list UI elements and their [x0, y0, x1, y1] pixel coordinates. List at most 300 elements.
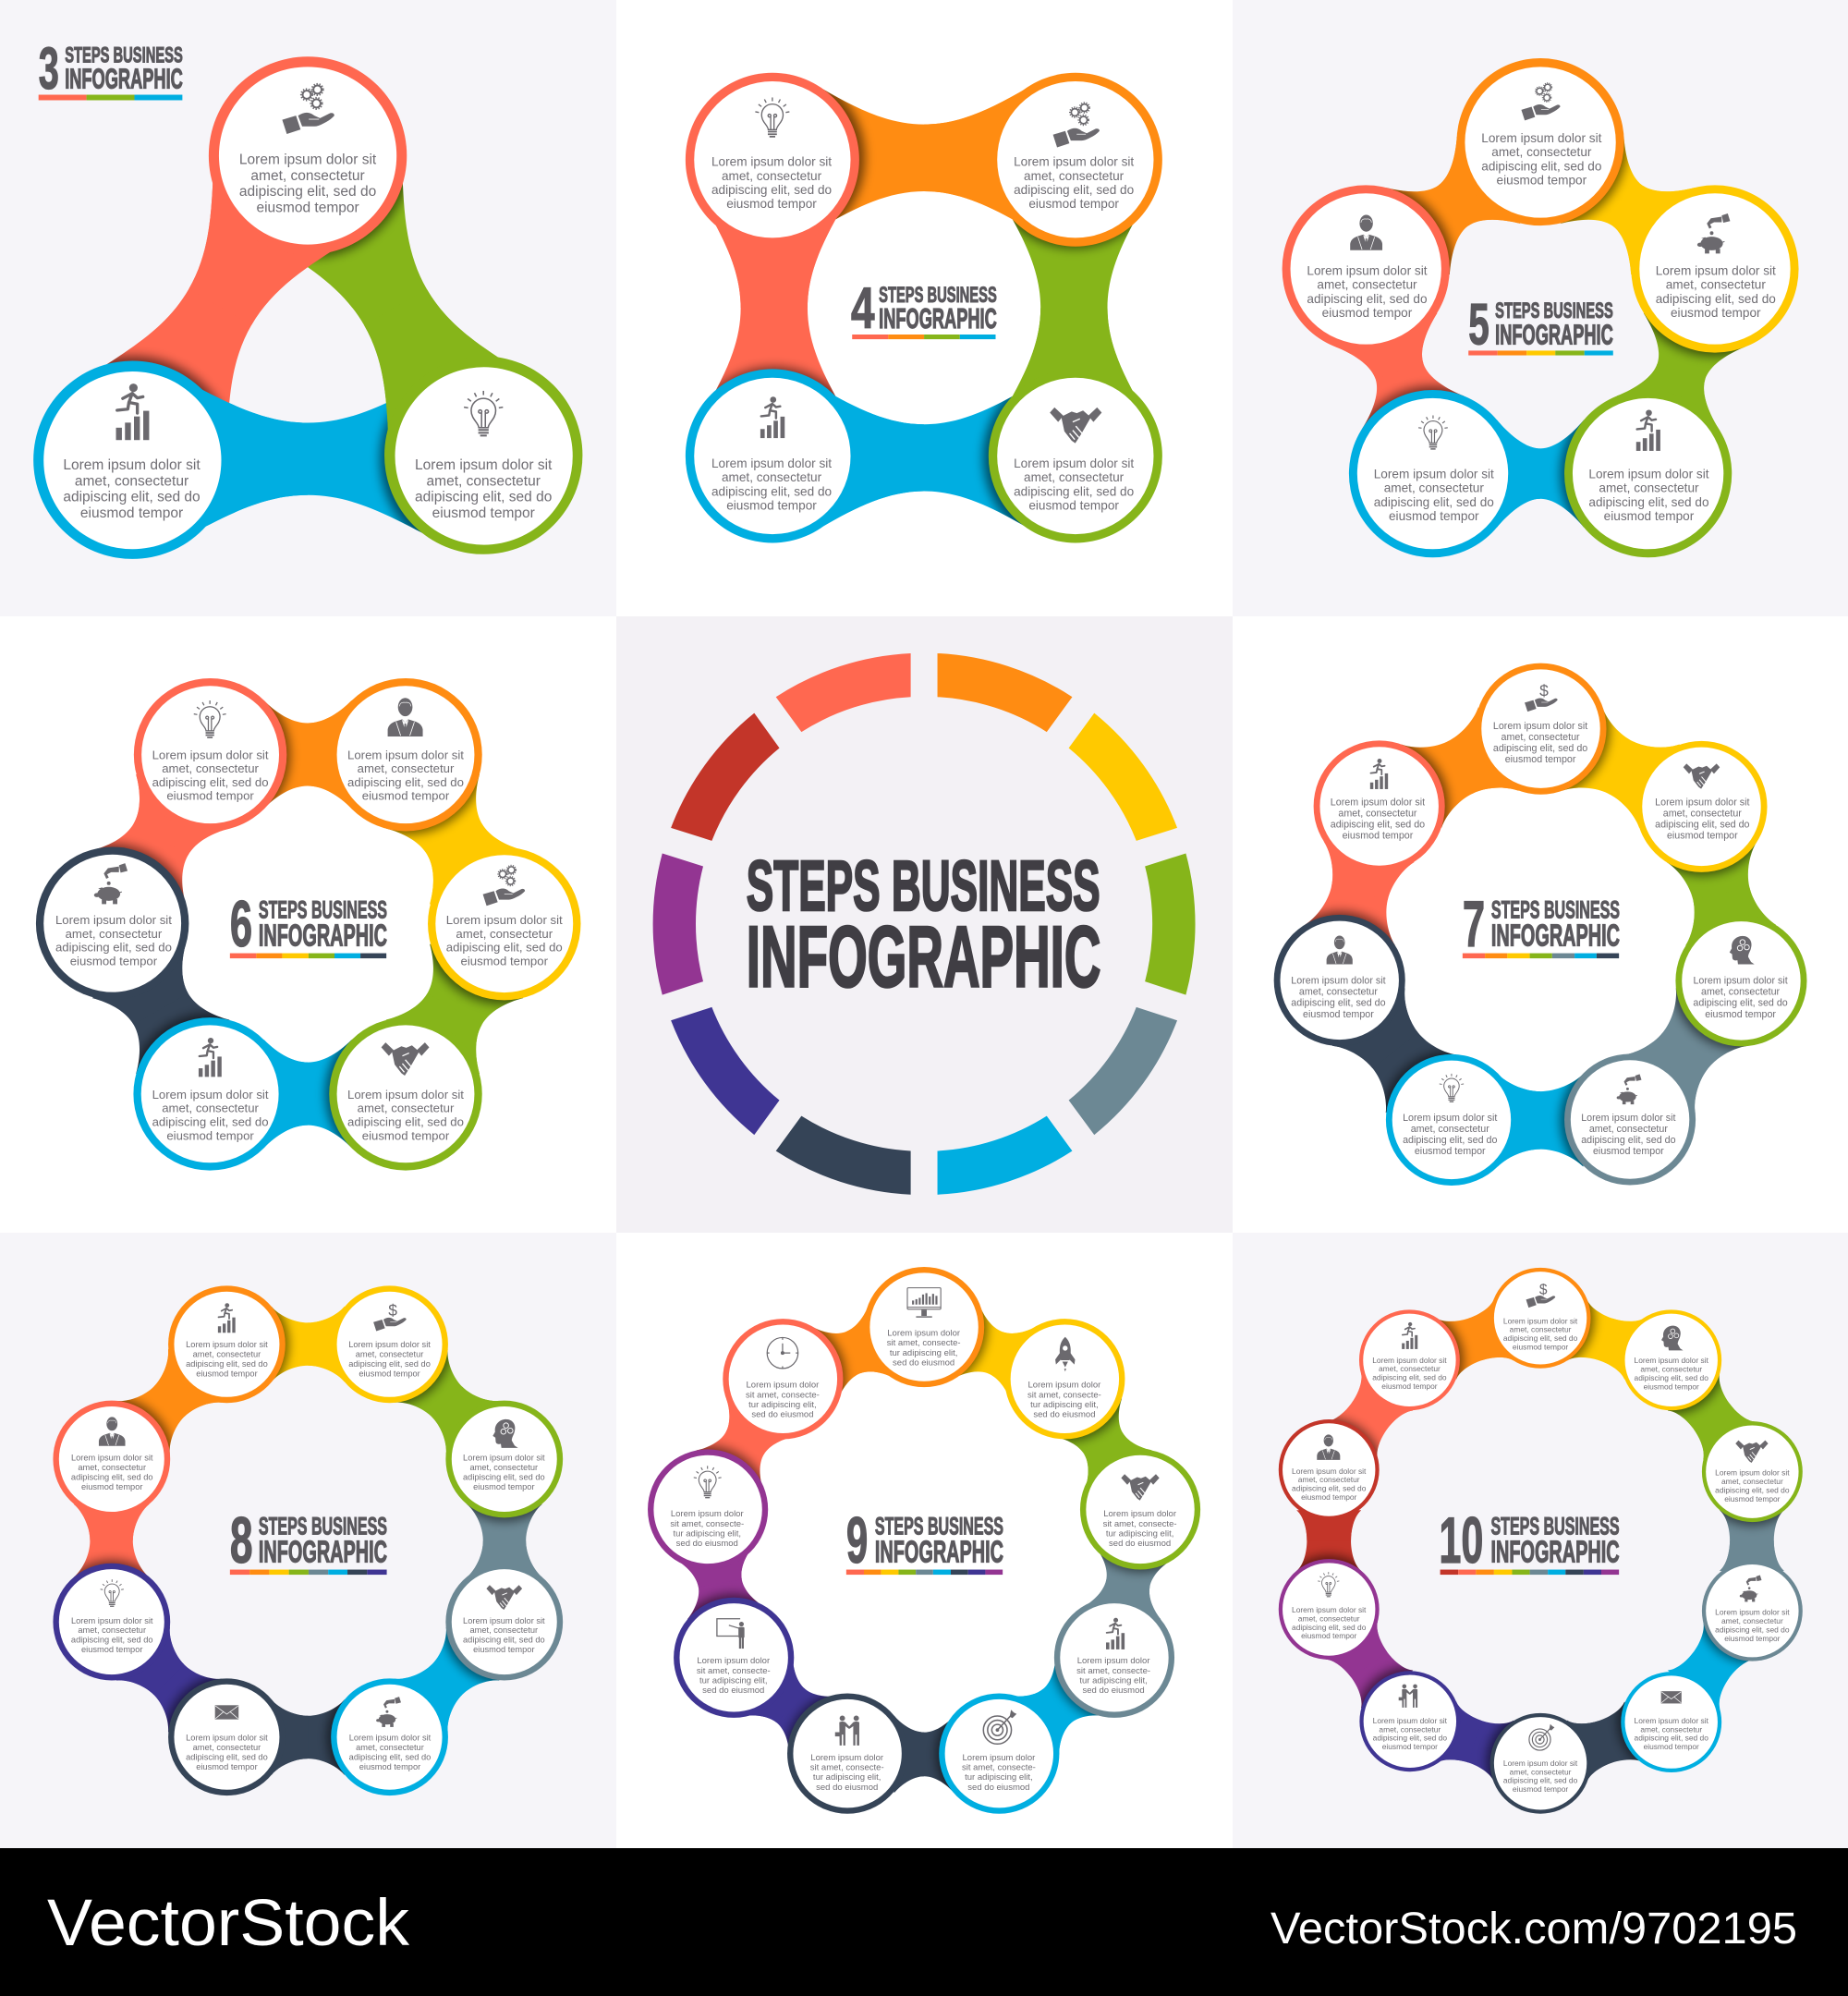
icon: runner on bars — [1636, 409, 1660, 451]
text: sit amet, consecte- — [962, 1763, 1036, 1773]
text: Lorem ipsum dolor sit — [186, 1340, 268, 1349]
text: eiusmod tempor — [1705, 1009, 1776, 1020]
step: yellow — [331, 1285, 448, 1403]
step: orange — [989, 73, 1162, 247]
icon: runner on bars — [1370, 759, 1388, 789]
text: eiusmod tempor — [1303, 1009, 1374, 1020]
text: amet, consectetur — [193, 1743, 261, 1752]
icon: piggy bank — [94, 863, 128, 904]
text: sit amet, consecte- — [1076, 1666, 1150, 1676]
connectors — [620, 1245, 1215, 1844]
step: gray — [1054, 1598, 1174, 1718]
text: amet, consectetur — [470, 1625, 538, 1635]
text: Lorem ipsum dolor sit — [463, 1454, 545, 1463]
step: navy — [168, 1678, 286, 1795]
text: sed do eiusmod — [816, 1783, 878, 1793]
step: coral — [1359, 1309, 1460, 1410]
text: Lorem ipsum dolor sit — [152, 748, 269, 761]
text: tur adipiscing elit, — [673, 1528, 741, 1539]
text: Lorem ipsum dolor sit — [55, 913, 172, 927]
step: cyan — [133, 1017, 286, 1171]
title: 6 steps — [230, 887, 387, 960]
step: purple — [648, 1449, 768, 1570]
text: Lorem ipsum dolor sit — [1292, 1605, 1367, 1614]
title: 7 steps — [1463, 887, 1620, 960]
text: adipiscing elit, sed do — [1292, 1484, 1367, 1493]
text: eiusmod tempor — [256, 201, 359, 216]
text: Lorem ipsum dolor — [962, 1753, 1036, 1763]
text: adipiscing elit, sed do — [152, 775, 269, 789]
text: amet, consectetur — [1317, 278, 1417, 292]
text: eiusmod tempor — [1667, 831, 1738, 842]
icon: light bulb — [1318, 1572, 1339, 1597]
text: Lorem ipsum dolor sit — [446, 913, 563, 927]
icon: light bulb — [694, 1466, 722, 1498]
text: eiusmod tempor — [473, 1645, 535, 1654]
text: Lorem ipsum dolor — [671, 1509, 744, 1519]
text: sit amet, consecte- — [697, 1666, 771, 1676]
text: amet, consectetur — [1299, 987, 1378, 998]
text: eiusmod tempor — [362, 789, 450, 803]
connectors — [684, 67, 1165, 549]
text: amet, consectetur — [78, 1463, 146, 1472]
step: orange — [1475, 663, 1607, 795]
text: amet, consectetur — [1721, 1477, 1783, 1486]
text: Lorem ipsum dolor sit — [1581, 1113, 1676, 1124]
step: navy — [1274, 915, 1405, 1046]
title: 9 steps — [846, 1503, 1003, 1576]
text: tur adipiscing elit, — [699, 1676, 768, 1686]
text: Lorem ipsum dolor sit — [71, 1616, 153, 1625]
text: adipiscing elit, sed do — [1014, 183, 1134, 197]
text: Lorem ipsum dolor sit — [1588, 467, 1709, 481]
ring segments — [653, 653, 1196, 1195]
text: Lorem ipsum dolor sit — [415, 457, 553, 473]
text: eiusmod tempor — [1724, 1494, 1781, 1503]
text: adipiscing elit, sed do — [1503, 1333, 1578, 1343]
icon: businessman — [1350, 215, 1382, 250]
text: Lorem ipsum dolor — [1028, 1381, 1101, 1391]
text: eiusmod tempor — [359, 1762, 420, 1771]
text: adipiscing elit, sed do — [55, 941, 172, 955]
title: 9 steps: INFOGRAPHIC — [875, 1535, 1003, 1569]
title: 10 steps: INFOGRAPHIC — [1490, 1535, 1620, 1569]
title: 5 steps: STEPS BUSINESS — [1495, 298, 1613, 323]
text: Lorem ipsum dolor — [887, 1328, 961, 1338]
icon: two people — [1399, 1685, 1417, 1708]
title: 4 steps: 4 — [851, 276, 874, 341]
title: 9 steps: STEPS BUSINESS — [875, 1512, 1003, 1540]
text: amet, consectetur — [1298, 1613, 1360, 1623]
icon: dollar in hand — [373, 1301, 407, 1332]
step: green — [1564, 390, 1732, 557]
step: green — [989, 369, 1162, 542]
text: Lorem ipsum dolor sit — [152, 1088, 269, 1101]
icon: gears in hand — [483, 866, 525, 906]
text: amet, consectetur — [250, 168, 365, 184]
text: Lorem ipsum dolor sit — [1331, 797, 1425, 809]
footer url: VectorStock.com/9702195 — [1270, 1905, 1797, 1953]
center title — [747, 847, 1100, 1005]
icon: handshake — [1735, 1441, 1769, 1463]
text: eiusmod tempor — [1644, 1742, 1699, 1751]
step: indigo — [674, 1598, 794, 1718]
title: 8 steps: INFOGRAPHIC — [259, 1535, 387, 1569]
title: 10 steps: STEPS BUSINESS — [1490, 1512, 1620, 1540]
step: coral — [1314, 740, 1445, 871]
icon: runner on bars — [199, 1038, 222, 1077]
icon: piggy bank — [376, 1697, 401, 1727]
icon: businessman — [1327, 936, 1353, 964]
text: eiusmod tempor — [726, 197, 817, 211]
text: amet, consectetur — [1379, 1724, 1441, 1734]
panel: 6 steps — [35, 678, 580, 1171]
step: coral — [686, 73, 859, 247]
text: adipiscing elit, sed do — [1635, 1734, 1708, 1743]
text: Lorem ipsum dolor sit — [1635, 1716, 1709, 1725]
icon: monitor chart — [907, 1288, 941, 1318]
title: 6 steps: 6 — [230, 887, 252, 960]
text: amet, consectetur — [1379, 1364, 1441, 1373]
text: amet, consectetur — [1721, 1616, 1783, 1625]
title: 7 steps: INFOGRAPHIC — [1491, 919, 1620, 953]
step: gray — [445, 1564, 563, 1681]
icon: two people — [835, 1715, 859, 1746]
title: 7 steps: STEPS BUSINESS — [1491, 895, 1620, 923]
step: yellow — [1004, 1319, 1125, 1439]
connectors — [1244, 19, 1825, 584]
text: amet, consectetur — [356, 1743, 424, 1752]
text: adipiscing elit, sed do — [446, 941, 563, 955]
step: green — [445, 1401, 563, 1517]
text: amet, consectetur — [1502, 732, 1580, 743]
footer bar — [0, 1848, 1848, 1996]
step: yellow — [1635, 741, 1768, 872]
panel: 7 steps — [1273, 663, 1807, 1186]
text: adipiscing elit, sed do — [711, 484, 832, 498]
title: 3 steps: STEPS BUSINESS — [65, 43, 183, 68]
text: adipiscing elit, sed do — [1403, 1135, 1497, 1146]
text: adipiscing elit, sed do — [152, 1114, 269, 1128]
text: Lorem ipsum dolor — [1103, 1509, 1177, 1519]
text: adipiscing elit, sed do — [463, 1636, 545, 1645]
text: sit amet, consecte- — [670, 1519, 744, 1529]
title: 8 steps: STEPS BUSINESS — [259, 1512, 387, 1540]
text: Lorem ipsum dolor sit — [347, 1088, 464, 1101]
text: adipiscing elit, sed do — [71, 1636, 153, 1645]
text: eiusmod tempor — [1724, 1634, 1781, 1643]
text: eiusmod tempor — [81, 1645, 142, 1654]
step: green — [1675, 915, 1806, 1046]
icon: light bulb — [1418, 415, 1448, 449]
step: cyan — [331, 1678, 448, 1795]
text: eiusmod tempor — [1644, 1382, 1699, 1392]
text: tur adipiscing elit, — [965, 1772, 1033, 1783]
text: adipiscing elit, sed do — [1503, 1776, 1578, 1785]
panel: 3 steps — [0, 0, 616, 616]
icon: gears in hand — [1521, 83, 1561, 120]
text: sed do eiusmod — [1109, 1539, 1171, 1549]
step: yellow — [428, 847, 581, 1000]
text: eiusmod tempor — [1513, 1343, 1568, 1352]
panel: 10 steps — [1233, 1233, 1848, 1848]
step: cyan — [1349, 390, 1516, 557]
icon: presenter — [717, 1619, 745, 1649]
step: coral — [134, 678, 286, 831]
text: amet, consectetur — [1701, 987, 1781, 998]
text: eiusmod tempor — [1343, 831, 1414, 842]
text: Lorem ipsum dolor sit — [1715, 1467, 1790, 1477]
text: adipiscing elit, sed do — [1655, 820, 1750, 831]
text: adipiscing elit, sed do — [186, 1359, 268, 1369]
text: amet, consectetur — [1024, 470, 1125, 484]
icon: light bulb — [101, 1579, 124, 1606]
text: adipiscing elit, sed do — [1331, 820, 1425, 831]
icon: dollar in hand — [1526, 1283, 1555, 1308]
text: eiusmod tempor — [1604, 509, 1695, 523]
text: adipiscing elit, sed do — [348, 1359, 431, 1369]
icon: light bulb — [464, 391, 503, 435]
text: Lorem ipsum dolor sit — [63, 457, 201, 473]
text: tur adipiscing elit, — [748, 1400, 817, 1410]
text: tur adipiscing elit, — [890, 1348, 957, 1358]
text: adipiscing elit, sed do — [1014, 484, 1134, 498]
text: adipiscing elit, sed do — [711, 183, 832, 197]
text: sed do eiusmod — [751, 1410, 814, 1420]
step: yellow — [1631, 185, 1799, 353]
step: gray — [1564, 1053, 1696, 1186]
text: adipiscing elit, sed do — [1493, 743, 1587, 754]
text: eiusmod tempor — [1389, 509, 1479, 523]
icon: businessman — [388, 698, 423, 736]
icon: head with gears — [492, 1419, 518, 1448]
icon: piggy bank — [1740, 1576, 1761, 1601]
connectors — [1254, 1250, 1827, 1831]
text: adipiscing elit, sed do — [1292, 1623, 1367, 1632]
text: Lorem ipsum dolor sit — [348, 1340, 431, 1349]
icon: businessman — [1317, 1434, 1340, 1460]
step: coral — [1283, 185, 1450, 353]
text: amet, consectetur — [427, 473, 541, 489]
text: adipiscing elit, sed do — [347, 775, 464, 789]
text: adipiscing elit, sed do — [1693, 998, 1788, 1009]
text: eiusmod tempor — [461, 954, 549, 968]
panel: 9 steps — [648, 1267, 1201, 1814]
text: eiusmod tempor — [80, 505, 183, 521]
text: amet, consectetur — [456, 927, 553, 941]
text: eiusmod tempor — [196, 1762, 258, 1771]
title: 9 steps: 9 — [846, 1503, 868, 1576]
text: eiusmod tempor — [166, 789, 254, 803]
icon: envelope — [215, 1705, 238, 1720]
icon: envelope — [1661, 1691, 1682, 1703]
step: green — [1080, 1449, 1200, 1570]
icon: piggy bank — [1697, 213, 1730, 253]
text: amet, consectetur — [1640, 1365, 1702, 1374]
text: amet, consectetur — [356, 1350, 423, 1359]
step: purple — [1279, 1559, 1380, 1660]
title: 4 steps: INFOGRAPHIC — [879, 304, 997, 335]
text: adipiscing elit, sed do — [186, 1752, 268, 1761]
text: sed do eiusmod — [893, 1357, 954, 1368]
text: eiusmod tempor — [726, 499, 817, 513]
text: eiusmod tempor — [166, 1128, 254, 1142]
text: tur adipiscing elit, — [1079, 1676, 1148, 1686]
text: eiusmod tempor — [1301, 1631, 1357, 1640]
text: eiusmod tempor — [81, 1482, 142, 1491]
text: eiusmod tempor — [1593, 1146, 1664, 1157]
text: adipiscing elit, sed do — [1715, 1485, 1790, 1494]
title: 8 steps — [230, 1503, 387, 1576]
connectors — [0, 15, 586, 600]
text: amet, consectetur — [1338, 809, 1417, 820]
text: amet, consectetur — [1024, 169, 1125, 183]
icon: runner on bars — [1402, 1322, 1417, 1349]
connectors — [24, 1257, 592, 1825]
text: Lorem ipsum dolor — [747, 1381, 820, 1391]
text: adipiscing elit, sed do — [71, 1472, 153, 1481]
text: Lorem ipsum dolor sit — [1715, 1607, 1790, 1616]
text: amet, consectetur — [1491, 145, 1592, 159]
text: adipiscing elit, sed do — [349, 1752, 431, 1761]
icon: rocket — [1055, 1337, 1076, 1371]
text: Lorem ipsum dolor sit — [1635, 1356, 1709, 1365]
text: sed do eiusmod — [967, 1783, 1029, 1793]
text: amet, consectetur — [1589, 1124, 1668, 1135]
text: Lorem ipsum dolor sit — [1693, 976, 1788, 987]
step: navy — [36, 846, 188, 1000]
text: eiusmod tempor — [1322, 306, 1413, 320]
text: tur adipiscing elit, — [1030, 1400, 1099, 1410]
step: coral — [53, 1401, 170, 1517]
text: sit amet, consecte- — [810, 1763, 884, 1773]
text: sit amet, consecte- — [1103, 1519, 1177, 1529]
step: orange — [1490, 1268, 1591, 1369]
step: dark red — [1279, 1419, 1380, 1520]
icon: dollar in hand — [1525, 682, 1558, 712]
step: yellow — [1621, 1309, 1721, 1410]
text: adipiscing elit, sed do — [1656, 292, 1776, 306]
title: 6 steps: INFOGRAPHIC — [259, 919, 387, 953]
text: sed do eiusmod — [1083, 1686, 1145, 1696]
text: eiusmod tempor — [196, 1369, 258, 1378]
text: amet, consectetur — [1599, 481, 1699, 495]
panel: center steps ring — [616, 616, 1233, 1233]
text: Lorem ipsum dolor sit — [71, 1454, 153, 1463]
icon: handshake — [1050, 408, 1101, 444]
step: coral — [209, 56, 407, 255]
text: adipiscing elit, sed do — [1588, 495, 1709, 509]
step: cyan — [939, 1694, 1059, 1814]
text: adipiscing elit, sed do — [63, 490, 201, 505]
text: sed do eiusmod — [676, 1539, 738, 1549]
step: navy — [1490, 1713, 1591, 1814]
icon: piggy bank — [1617, 1074, 1642, 1104]
text: eiusmod tempor — [1513, 1784, 1568, 1794]
text: Lorem ipsum dolor sit — [1372, 1356, 1447, 1365]
connectors — [1257, 637, 1838, 1217]
text: Lorem ipsum dolor — [697, 1656, 771, 1666]
step: cyan — [686, 369, 859, 542]
text: amet, consectetur — [1640, 1724, 1702, 1734]
text: Lorem ipsum dolor sit — [1373, 1716, 1448, 1725]
icon: handshake — [1121, 1474, 1160, 1501]
text: Lorem ipsum dolor sit — [347, 748, 464, 761]
step: cyan — [1386, 1054, 1517, 1186]
text: eiusmod tempor — [1497, 174, 1587, 188]
icon: businessman — [99, 1417, 126, 1446]
text: Lorem ipsum dolor — [1077, 1656, 1150, 1666]
step: orange — [329, 678, 482, 831]
text: eiusmod tempor — [432, 505, 535, 521]
text: Lorem ipsum dolor sit — [1403, 1113, 1497, 1124]
step: green — [384, 356, 582, 554]
text: eiusmod tempor — [1671, 306, 1761, 320]
step: green — [329, 1017, 482, 1171]
icon: gears in hand — [282, 84, 334, 134]
title: 5 steps: INFOGRAPHIC — [1495, 321, 1613, 351]
icon: target — [983, 1710, 1016, 1744]
text: sit amet, consecte- — [1027, 1390, 1101, 1400]
text: amet, consectetur — [162, 761, 260, 775]
icon: head with gears — [1730, 936, 1755, 964]
text: eiusmod tempor — [473, 1482, 535, 1491]
text: Lorem ipsum dolor sit — [1014, 155, 1134, 169]
text: eiusmod tempor — [362, 1128, 450, 1142]
text: sit amet, consecte- — [746, 1390, 820, 1400]
step: gray — [1702, 1561, 1803, 1661]
title: 7 steps: 7 — [1463, 887, 1485, 960]
text: amet, consectetur — [470, 1463, 538, 1472]
title: 3 steps: 3 — [39, 35, 59, 102]
text: Lorem ipsum dolor sit — [1655, 797, 1750, 809]
text: amet, consectetur — [1663, 809, 1742, 820]
text: eiusmod tempor — [1415, 1146, 1486, 1157]
title: 3 steps: INFOGRAPHIC — [65, 65, 183, 95]
icon: runner on bars — [116, 383, 149, 440]
text: adipiscing elit, sed do — [1715, 1625, 1790, 1634]
text: eiusmod tempor — [70, 954, 158, 968]
text: eiusmod tempor — [1028, 197, 1119, 211]
icon: light bulb — [1440, 1074, 1464, 1101]
text: adipiscing elit, sed do — [463, 1472, 545, 1481]
text: amet, consectetur — [358, 761, 455, 775]
title: 5 steps — [1468, 293, 1613, 358]
text: tur adipiscing elit, — [1106, 1528, 1173, 1539]
icon: clock — [767, 1337, 798, 1369]
text: Lorem ipsum dolor sit — [1014, 456, 1134, 470]
text: adipiscing elit, sed do — [1581, 1135, 1676, 1146]
icon: handshake — [1684, 763, 1720, 789]
text: amet, consectetur — [1510, 1325, 1572, 1334]
text: sed do eiusmod — [1033, 1410, 1096, 1420]
title: 10 steps: 10 — [1439, 1503, 1483, 1576]
icon: runner on bars — [1106, 1618, 1125, 1649]
icon: handshake — [382, 1042, 430, 1076]
icon: runner on bars — [760, 396, 784, 438]
icon: head with gears — [1661, 1326, 1684, 1350]
text: eiusmod tempor — [1028, 499, 1119, 513]
text: adipiscing elit, sed do — [1372, 1373, 1447, 1382]
text: Lorem ipsum dolor sit — [1656, 263, 1776, 277]
title: 4 steps — [851, 276, 997, 341]
text: amet, consectetur — [75, 473, 188, 489]
text: Lorem ipsum dolor sit — [1374, 467, 1494, 481]
icon: runner on bars — [218, 1303, 236, 1333]
text: adipiscing elit, sed do — [1307, 292, 1428, 306]
text: amet, consectetur — [66, 927, 163, 941]
text: adipiscing elit, sed do — [415, 490, 552, 505]
